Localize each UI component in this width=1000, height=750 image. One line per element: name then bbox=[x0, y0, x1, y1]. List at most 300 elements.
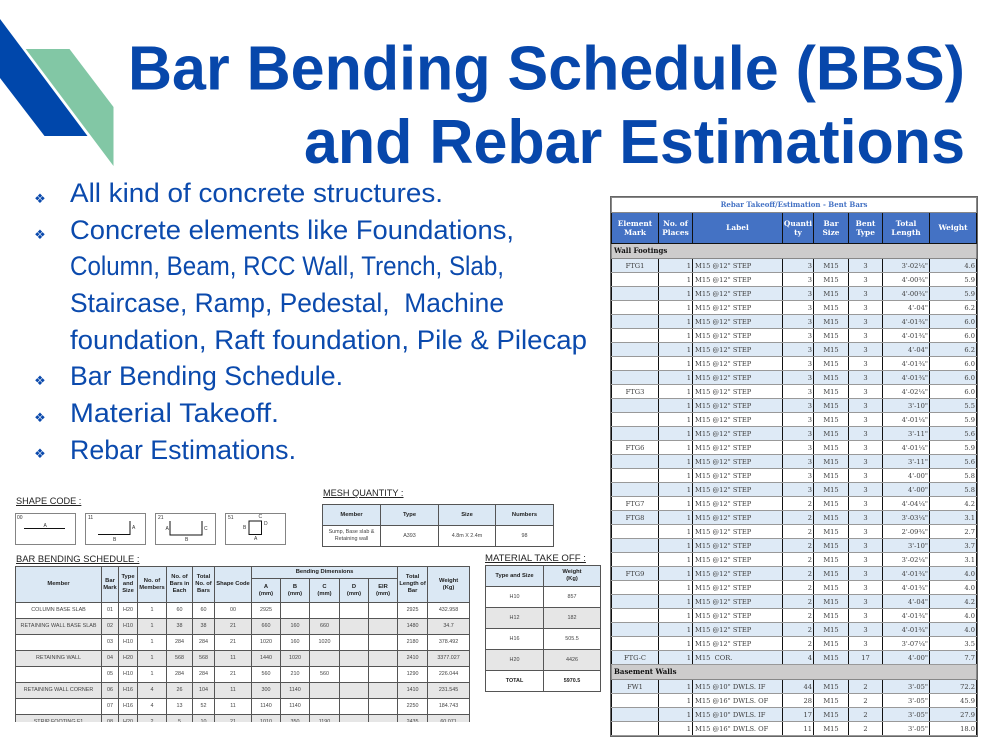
table: bar bending schedule: 38 bbox=[200, 623, 206, 629]
table: bar bending schedule: 284 bbox=[175, 671, 184, 677]
table: rebar takeoff and estimation, bent bars: 4'-01¾" bbox=[902, 318, 928, 326]
table: rebar takeoff and estimation, bent bars: M15 bbox=[823, 402, 839, 410]
table: bar bending schedule: 568 bbox=[175, 655, 184, 661]
table: rebar takeoff and estimation, bent bars: 1 bbox=[687, 304, 691, 312]
table: rebar takeoff and estimation, bent bars: M15 bbox=[823, 346, 839, 354]
table: rebar takeoff and estimation, bent bars: 45.9 bbox=[960, 696, 975, 704]
table: bar bending schedule: 38 bbox=[176, 623, 182, 629]
table: rebar takeoff and estimation, bent bars: M15 @12" STEP bbox=[695, 304, 751, 312]
table: mesh quantity: Sump, Base slab & Retaining wall bbox=[329, 529, 374, 542]
table: rebar takeoff and estimation, bent bars: M15 bbox=[823, 430, 839, 438]
table: rebar takeoff and estimation, bent bars: 3'-05" bbox=[908, 696, 928, 704]
table: bar bending schedule: 03 bbox=[107, 639, 113, 645]
table: rebar takeoff and estimation, bent bars: 1 bbox=[687, 626, 691, 634]
table: rebar takeoff and estimation, bent bars: M15 @12" STEP bbox=[695, 332, 751, 340]
table: material take off: Weight bbox=[562, 569, 582, 575]
table: rebar takeoff and estimation, bent bars: 6.0 bbox=[964, 318, 975, 326]
table: rebar takeoff and estimation, bent bars: Quanti ty bbox=[784, 218, 812, 237]
shape code diagrams bbox=[15, 513, 286, 545]
table: rebar takeoff and estimation, bent bars: 3 bbox=[863, 598, 868, 606]
table: rebar takeoff and estimation, bent bars: M15 @10" DWLS. IF bbox=[695, 682, 765, 690]
table: rebar takeoff and estimation, bent bars: M15 bbox=[823, 262, 839, 270]
table: rebar takeoff and estimation, bent bars: 11 bbox=[803, 724, 812, 732]
bullet list: scope of work: ❖ bbox=[34, 447, 46, 462]
table: rebar takeoff and estimation, bent bars: M15 @12" STEP bbox=[695, 290, 751, 298]
shape code diagrams: 11 bbox=[88, 515, 93, 521]
table: bar bending schedule: 226.044 bbox=[439, 671, 458, 677]
table: bar bending schedule: (mm) bbox=[259, 590, 273, 596]
table: bar bending schedule: Weight bbox=[439, 578, 458, 584]
table: bar bending schedule: 1140 bbox=[260, 703, 272, 709]
table: rebar takeoff and estimation, bent bars: 3.5 bbox=[964, 640, 975, 648]
table: rebar takeoff and estimation, bent bars: 3 bbox=[863, 276, 868, 284]
table: rebar takeoff and estimation, bent bars: M15 @16" DWLS. OF bbox=[695, 724, 768, 732]
table: rebar takeoff and estimation, bent bars: M15 @12" STEP bbox=[695, 556, 751, 564]
bullet list: scope of work: Column, Beam, RCC Wall, Trench, Slab, bbox=[70, 251, 504, 281]
table: bar bending schedule bbox=[15, 566, 470, 722]
table: bar bending schedule: 560 bbox=[262, 671, 270, 677]
table: rebar takeoff and estimation, bent bars: 3 bbox=[863, 542, 868, 550]
table: rebar takeoff and estimation, bent bars: 1 bbox=[687, 528, 691, 536]
table: rebar takeoff and estimation, bent bars: 4.0 bbox=[964, 570, 975, 578]
table: rebar takeoff and estimation, bent bars: 5.5 bbox=[964, 402, 975, 410]
table: bar bending schedule: 210 bbox=[290, 671, 300, 677]
table: bar bending schedule: 1 bbox=[150, 671, 154, 677]
table: rebar takeoff and estimation, bent bars: 3 bbox=[863, 556, 868, 564]
table: rebar takeoff and estimation, bent bars: 3'-10" bbox=[908, 542, 928, 550]
table: rebar takeoff and estimation, bent bars: 1 bbox=[687, 696, 691, 704]
table: rebar takeoff and estimation, bent bars: FTG3 bbox=[626, 388, 644, 396]
table: bar bending schedule: EIR bbox=[378, 584, 388, 590]
table: rebar takeoff and estimation, bent bars: 4'-02¼" bbox=[902, 388, 928, 396]
table: rebar takeoff and estimation, bent bars: 1 bbox=[687, 598, 691, 606]
table: rebar takeoff and estimation, bent bars: 3 bbox=[863, 332, 868, 340]
bullet list: scope of work: ❖ bbox=[34, 228, 46, 243]
table: rebar takeoff and estimation, bent bars: 6.2 bbox=[964, 304, 975, 312]
table: rebar takeoff and estimation, bent bars: M15 bbox=[823, 332, 839, 340]
table: rebar takeoff and estimation, bent bars: 4.0 bbox=[964, 626, 975, 634]
bullet list: scope of work: foundation, Raft foundation, Pile & Pilecap bbox=[70, 325, 587, 355]
table: rebar takeoff and estimation, bent bars: 1 bbox=[687, 458, 691, 466]
shape code diagrams: 51 bbox=[228, 515, 234, 521]
table: rebar takeoff and estimation, bent bars: M15 bbox=[823, 542, 839, 550]
table: rebar takeoff and estimation, bent bars: M15 bbox=[823, 416, 839, 424]
table: rebar takeoff and estimation, bent bars: M15 bbox=[823, 360, 839, 368]
table: bar bending schedule: Total No. of Bars bbox=[195, 574, 212, 594]
table: rebar takeoff and estimation, bent bars: 2 bbox=[808, 500, 812, 508]
table: rebar takeoff and estimation, bent bars: 3 bbox=[863, 486, 868, 494]
table: bar bending schedule: C bbox=[322, 584, 327, 590]
table: bar bending schedule: 13 bbox=[176, 703, 182, 709]
table: rebar takeoff and estimation, bent bars: 4.6 bbox=[964, 262, 975, 270]
table: rebar takeoff and estimation, bent bars: FTG-C bbox=[624, 654, 646, 662]
table: rebar takeoff and estimation, bent bars: Element Mark bbox=[618, 218, 652, 237]
table: rebar takeoff and estimation, bent bars: 3 bbox=[808, 346, 812, 354]
shape code diagrams: B bbox=[243, 525, 247, 531]
table: rebar takeoff and estimation, bent bars: M15 @12" STEP bbox=[695, 388, 751, 396]
table: bar bending schedule: RETAINING WALL bbox=[36, 655, 81, 661]
table: rebar takeoff and estimation, bent bars: 3'-10" bbox=[908, 402, 928, 410]
bullet list: scope of work: All kind of concrete structures. bbox=[70, 178, 443, 208]
table: rebar takeoff and estimation, bent bars: M15 @12" STEP bbox=[695, 584, 751, 592]
table: bar bending schedule: 284 bbox=[199, 671, 208, 677]
table: rebar takeoff and estimation, bent bars: M15 @12" STEP bbox=[695, 318, 751, 326]
table: bar bending schedule: Type and Size bbox=[121, 574, 135, 594]
table: bar bending schedule: 52 bbox=[200, 703, 206, 709]
table: rebar takeoff and estimation, bent bars: Basement Walls bbox=[614, 667, 677, 676]
table: rebar takeoff and estimation, bent bars: 2 bbox=[808, 598, 812, 606]
table: rebar takeoff and estimation, bent bars: 4'-01¾" bbox=[902, 374, 928, 382]
table: rebar takeoff and estimation, bent bars: 3 bbox=[808, 332, 812, 340]
table: rebar takeoff and estimation, bent bars: 1 bbox=[687, 416, 691, 424]
table: rebar takeoff and estimation, bent bars: 7.7 bbox=[964, 654, 975, 662]
table: rebar takeoff and estimation, bent bars: 1 bbox=[687, 388, 691, 396]
bullet list: scope of work: Concrete elements like Foundations, bbox=[70, 215, 514, 245]
table: rebar takeoff and estimation, bent bars: 17 bbox=[861, 654, 870, 662]
table: rebar takeoff and estimation, bent bars: 28 bbox=[803, 696, 812, 704]
table: bar bending schedule: 184.743 bbox=[439, 703, 458, 709]
table: bar bending schedule: No. of Bars in Each bbox=[170, 574, 189, 594]
table: rebar takeoff and estimation, bent bars: 2.7 bbox=[964, 528, 975, 536]
table: bar bending schedule: 1140 bbox=[289, 703, 301, 709]
table: rebar takeoff and estimation, bent bars: 2 bbox=[863, 696, 868, 704]
table: material take off: 857 bbox=[568, 594, 576, 600]
table: bar bending schedule: No. of Members bbox=[139, 578, 165, 590]
table: rebar takeoff and estimation, bent bars: 3 bbox=[808, 416, 812, 424]
table: rebar takeoff and estimation, bent bars: 4'-00¾" bbox=[902, 290, 928, 298]
heading: shape code: SHAPE CODE : bbox=[16, 496, 81, 506]
table: rebar takeoff and estimation, bent bars: 3 bbox=[863, 262, 868, 270]
table: rebar takeoff and estimation, bent bars: 3'-05" bbox=[908, 682, 928, 690]
table: rebar takeoff and estimation, bent bars: 1 bbox=[687, 710, 691, 718]
table: rebar takeoff and estimation, bent bars: 5.9 bbox=[964, 276, 975, 284]
table: rebar takeoff and estimation, bent bars: 1 bbox=[687, 486, 691, 494]
table: rebar takeoff and estimation, bent bars: 2 bbox=[808, 626, 812, 634]
table: rebar takeoff and estimation, bent bars: 3'-07¼" bbox=[902, 640, 928, 648]
table: material take off: H16 bbox=[510, 636, 519, 642]
table: rebar takeoff and estimation, bent bars: 3'-03¼" bbox=[902, 514, 928, 522]
table: rebar takeoff and estimation, bent bars: Wall Footings bbox=[614, 246, 667, 255]
table: rebar takeoff and estimation, bent bars: 17 bbox=[803, 710, 812, 718]
table: rebar takeoff and estimation, bent bars: M15 COR. bbox=[695, 654, 732, 662]
table: rebar takeoff and estimation, bent bars: Bar bbox=[824, 218, 838, 228]
table: rebar takeoff and estimation, bent bars: M15 @12" STEP bbox=[695, 612, 751, 620]
table: rebar takeoff and estimation, bent bars: M15 @12" STEP bbox=[695, 570, 751, 578]
shape code diagrams: A bbox=[254, 536, 258, 542]
table: rebar takeoff and estimation, bent bars: M15 bbox=[823, 486, 839, 494]
shape code diagrams: D bbox=[264, 521, 268, 527]
table: mesh quantity: Type bbox=[403, 512, 416, 518]
table: rebar takeoff and estimation, bent bars: M15 @12" STEP bbox=[695, 626, 751, 634]
heading: bar bending schedule: BAR BENDING SCHEDULE : bbox=[16, 553, 139, 564]
table: rebar takeoff and estimation, bent bars: M15 @12" STEP bbox=[695, 458, 751, 466]
table: rebar takeoff and estimation, bent bars: 3 bbox=[808, 486, 812, 494]
table: rebar takeoff and estimation, bent bars: 3 bbox=[863, 472, 868, 480]
table: rebar takeoff and estimation, bent bars: 2'-09¾" bbox=[902, 528, 928, 536]
table: bar bending schedule: 660 bbox=[320, 623, 329, 629]
table: rebar takeoff and estimation, bent bars: 2 bbox=[808, 514, 812, 522]
table: rebar takeoff and estimation, bent bars: Size bbox=[822, 228, 840, 237]
table: rebar takeoff and estimation, bent bars: 1 bbox=[687, 500, 691, 508]
table: bar bending schedule: Shape Code bbox=[216, 581, 250, 587]
table: bar bending schedule: 2250 bbox=[407, 703, 419, 709]
table: material take off: Type and Size bbox=[495, 572, 534, 578]
table: rebar takeoff and estimation, bent bars: 5.6 bbox=[964, 458, 975, 466]
table: rebar takeoff and estimation, bent bars: 1 bbox=[687, 262, 691, 270]
table: bar bending schedule: 11 bbox=[230, 703, 236, 709]
table: rebar takeoff and estimation, bent bars: 3 bbox=[863, 626, 868, 634]
table: rebar takeoff and estimation, bent bars: 1 bbox=[687, 472, 691, 480]
table: rebar takeoff and estimation, bent bars: 4'-01¾" bbox=[902, 612, 928, 620]
table: rebar takeoff and estimation, bent bars: 2 bbox=[808, 570, 812, 578]
table: rebar takeoff and estimation, bent bars: 3 bbox=[863, 458, 868, 466]
table: rebar takeoff and estimation, bent bars: 3 bbox=[863, 528, 868, 536]
table: rebar takeoff and estimation, bent bars: 5.9 bbox=[964, 444, 975, 452]
table: rebar takeoff and estimation, bent bars: 6.0 bbox=[964, 388, 975, 396]
table: bar bending schedule: H16 bbox=[123, 703, 133, 709]
table: rebar takeoff and estimation, bent bars: M15 bbox=[823, 514, 839, 522]
table: material take off: H20 bbox=[510, 656, 519, 662]
shape code diagrams: B bbox=[185, 537, 189, 543]
table: mesh quantity: A393 bbox=[403, 532, 416, 538]
table: rebar takeoff and estimation, bent bars: 4'-04" bbox=[908, 346, 928, 354]
table: rebar takeoff and estimation, bent bars: 2 bbox=[863, 682, 868, 690]
table: rebar takeoff and estimation, bent bars: 3 bbox=[863, 318, 868, 326]
table: bar bending schedule: 660 bbox=[262, 623, 270, 629]
table: rebar takeoff and estimation, bent bars: 2 bbox=[808, 542, 812, 550]
table: mesh quantity: Numbers bbox=[512, 512, 537, 518]
table: rebar takeoff and estimation, bent bars: M15 @12" STEP bbox=[695, 514, 751, 522]
table: rebar takeoff and estimation, bent bars: 1 bbox=[687, 332, 691, 340]
table: bar bending schedule: 1 bbox=[150, 623, 154, 629]
table: rebar takeoff and estimation, bent bars: 3 bbox=[863, 444, 868, 452]
table: rebar takeoff and estimation, bent bars: 4'-01¾" bbox=[902, 332, 928, 340]
table: bar bending schedule: 00 bbox=[230, 607, 236, 613]
shape code diagrams: A bbox=[44, 523, 48, 529]
table: rebar takeoff and estimation, bent bars: M15 @12" STEP bbox=[695, 276, 751, 284]
table: bar bending schedule: 01 bbox=[107, 607, 113, 613]
table: rebar takeoff and estimation, bent bars: Total Length bbox=[891, 218, 921, 237]
table: bar bending schedule: 284 bbox=[175, 639, 184, 645]
bullet list: scope of work: Staircase, Ramp, Pedestal, Machine bbox=[70, 288, 504, 318]
table: rebar takeoff and estimation, bent bars: 3'-11" bbox=[908, 430, 928, 438]
table: rebar takeoff and estimation, bent bars: 6.0 bbox=[964, 374, 975, 382]
table: rebar takeoff and estimation, bent bars: M15 @12" STEP bbox=[695, 262, 751, 270]
title bbox=[128, 34, 965, 175]
table: rebar takeoff and estimation, bent bars: M15 @12" STEP bbox=[695, 402, 751, 410]
table: rebar takeoff and estimation, bent bars: M15 bbox=[823, 570, 839, 578]
table: rebar takeoff and estimation, bent bars: 1 bbox=[687, 584, 691, 592]
table: bar bending schedule: 04 bbox=[107, 655, 113, 661]
table: rebar takeoff and estimation, bent bars: 4'-01¼" bbox=[902, 416, 928, 424]
table: rebar takeoff and estimation, bent bars: 1 bbox=[687, 514, 691, 522]
table: rebar takeoff and estimation, bent bars: 4'-00" bbox=[908, 486, 928, 494]
table: bar bending schedule: 26 bbox=[176, 687, 182, 693]
table: mesh quantity: 98 bbox=[522, 532, 528, 538]
table: rebar takeoff and estimation, bent bars: 3 bbox=[863, 514, 868, 522]
table: rebar takeoff and estimation, bent bars: 6.2 bbox=[964, 346, 975, 354]
shape code diagrams: A bbox=[166, 526, 170, 532]
table: bar bending schedule: RETAINING WALL CORNER bbox=[24, 687, 93, 693]
table: bar bending schedule: 432.958 bbox=[439, 607, 458, 613]
table: bar bending schedule: D bbox=[352, 584, 356, 590]
table: bar bending schedule: 300 bbox=[262, 687, 270, 693]
table: mesh quantity bbox=[322, 504, 554, 547]
table: rebar takeoff and estimation, bent bars: 3 bbox=[863, 612, 868, 620]
table: bar bending schedule: 60 bbox=[176, 607, 182, 613]
table: bar bending schedule: 160 bbox=[290, 623, 300, 629]
table: bar bending schedule: H10 bbox=[123, 671, 133, 677]
table: rebar takeoff and estimation, bent bars: 3 bbox=[863, 430, 868, 438]
logo: blue and green slanted shapes bbox=[0, 19, 114, 166]
shape code diagrams: 21 bbox=[158, 515, 164, 521]
table: rebar takeoff and estimation, bent bars: M15 bbox=[823, 388, 839, 396]
table: rebar takeoff and estimation, bent bars: 1 bbox=[687, 346, 691, 354]
table: rebar takeoff and estimation, bent bars: M15 @12" STEP bbox=[695, 416, 751, 424]
table: rebar takeoff and estimation, bent bars: M15 bbox=[823, 290, 839, 298]
table: bar bending schedule: B bbox=[293, 584, 297, 590]
table: rebar takeoff and estimation, bent bars: 2 bbox=[808, 584, 812, 592]
table: rebar takeoff and estimation, bent bars: 1 bbox=[687, 724, 691, 732]
table: rebar takeoff and estimation, bent bars: 1 bbox=[687, 570, 691, 578]
table: rebar takeoff and estimation, bent bars: 4.0 bbox=[964, 612, 975, 620]
table: bar bending schedule: (mm) bbox=[317, 590, 332, 596]
table: rebar takeoff and estimation, bent bars: 3 bbox=[863, 360, 868, 368]
table: rebar takeoff and estimation, bent bars: 4 bbox=[808, 654, 812, 662]
table: rebar takeoff and estimation, bent bars: 1 bbox=[687, 318, 691, 326]
shape code diagrams: B bbox=[113, 537, 117, 543]
table: bar bending schedule: 1480 bbox=[407, 623, 419, 629]
table: rebar takeoff and estimation, bent bars bbox=[610, 196, 978, 737]
table: rebar takeoff and estimation, bent bars: M15 @12" STEP bbox=[695, 528, 751, 536]
table: rebar takeoff and estimation, bent bars: M15 @12" STEP bbox=[695, 346, 751, 354]
table: bar bending schedule: Total Length of Bar bbox=[399, 574, 426, 594]
table: rebar takeoff and estimation, bent bars: 4'-00" bbox=[908, 654, 928, 662]
table: rebar takeoff and estimation, bent bars: 5.6 bbox=[964, 430, 975, 438]
table: rebar takeoff and estimation, bent bars: 3'-11" bbox=[908, 458, 928, 466]
bullet list: scope of work bbox=[34, 178, 587, 465]
table: rebar takeoff and estimation, bent bars: 1 bbox=[687, 444, 691, 452]
table: rebar takeoff and estimation, bent bars: 1 bbox=[687, 374, 691, 382]
table: bar bending schedule: 378.492 bbox=[439, 639, 458, 645]
table: rebar takeoff and estimation, bent bars: FTG7 bbox=[626, 500, 644, 508]
table: bar bending schedule: 21 bbox=[230, 639, 236, 645]
table: rebar takeoff and estimation, bent bars: 2 bbox=[808, 640, 812, 648]
table: rebar takeoff and estimation, bent bars: 3 bbox=[863, 374, 868, 382]
table: rebar takeoff and estimation, bent bars: M15 @12" STEP bbox=[695, 486, 751, 494]
table: rebar takeoff and estimation, bent bars: 4'-00" bbox=[908, 472, 928, 480]
table: rebar takeoff and estimation, bent bars: 44 bbox=[803, 682, 812, 690]
table: rebar takeoff and estimation, bent bars: 6.0 bbox=[964, 360, 975, 368]
bullet list: scope of work: ❖ bbox=[34, 374, 46, 389]
table: bar bending schedule: 160 bbox=[290, 639, 300, 645]
table: bar bending schedule: COLUMN BASE SLAB bbox=[31, 607, 86, 613]
table: rebar takeoff and estimation, bent bars: 3.1 bbox=[964, 514, 975, 522]
table: rebar takeoff and estimation, bent bars: 1 bbox=[687, 654, 691, 662]
table: rebar takeoff and estimation, bent bars: 72.2 bbox=[960, 682, 975, 690]
table: rebar takeoff and estimation, bent bars: 2 bbox=[808, 612, 812, 620]
table: rebar takeoff and estimation, bent bars: 1 bbox=[687, 556, 691, 564]
table: rebar takeoff and estimation, bent bars: M15 @10" DWLS. IF bbox=[695, 710, 765, 718]
table: rebar takeoff and estimation, bent bars: M15 bbox=[823, 654, 839, 662]
table: rebar takeoff and estimation, bent bars: M15 bbox=[823, 374, 839, 382]
table: bar bending schedule: 4 bbox=[150, 703, 154, 709]
table: bar bending schedule: 284 bbox=[199, 639, 208, 645]
table: rebar takeoff and estimation, bent bars: M15 bbox=[823, 640, 839, 648]
table: rebar takeoff and estimation, bent bars: M15 bbox=[823, 276, 839, 284]
table: rebar takeoff and estimation, bent bars: 3 bbox=[808, 458, 812, 466]
table: rebar takeoff and estimation, bent bars: 5.8 bbox=[964, 486, 975, 494]
table: bar bending schedule: 1 bbox=[150, 639, 154, 645]
table: rebar takeoff and estimation, bent bars: 2 bbox=[808, 556, 812, 564]
table: rebar takeoff and estimation, bent bars: M15 bbox=[823, 556, 839, 564]
table: bar bending schedule: (Kg) bbox=[443, 584, 454, 590]
table: material take off: H12 bbox=[510, 614, 519, 620]
bullet list: scope of work: ❖ bbox=[34, 192, 46, 207]
table: rebar takeoff and estimation, bent bars: No. of Places bbox=[662, 218, 689, 237]
table: rebar takeoff and estimation, bent bars: M15 @12" STEP bbox=[695, 640, 751, 648]
table: bar bending schedule: Bending Dimensions bbox=[296, 569, 353, 575]
table: bar bending schedule: 2925 bbox=[260, 607, 272, 613]
table: rebar takeoff and estimation, bent bars: 5.8 bbox=[964, 472, 975, 480]
table: bar bending schedule: 1020 bbox=[289, 655, 301, 661]
table: rebar takeoff and estimation, bent bars: 3 bbox=[808, 262, 812, 270]
table: rebar takeoff and estimation, bent bars: 4'-00¾" bbox=[902, 276, 928, 284]
table: rebar takeoff and estimation, bent bars: M15 bbox=[823, 584, 839, 592]
table: rebar takeoff and estimation, bent bars: 4'-04¼" bbox=[902, 500, 928, 508]
table: rebar takeoff and estimation, bent bars: Label bbox=[726, 223, 749, 232]
table: rebar takeoff and estimation, bent bars: M15 bbox=[823, 682, 839, 690]
bullet list: scope of work: Bar Bending Schedule. bbox=[70, 361, 343, 391]
title: Bar Bending Schedule (BBS) bbox=[128, 34, 965, 104]
table: rebar takeoff and estimation, bent bars: 5.9 bbox=[964, 290, 975, 298]
table: mesh quantity: 4.8m X 2.4m bbox=[452, 532, 482, 538]
table: rebar takeoff and estimation, bent bars: 18.0 bbox=[960, 724, 975, 732]
table: bar bending schedule: 2925 bbox=[407, 607, 419, 613]
table: bar bending schedule: 11 bbox=[230, 655, 236, 661]
table: rebar takeoff and estimation, bent bars: 3.1 bbox=[964, 556, 975, 564]
table: bar bending schedule: 104 bbox=[199, 687, 208, 693]
table: bar bending schedule: H20 bbox=[123, 655, 133, 661]
table: rebar takeoff and estimation, bent bars: M15 bbox=[823, 500, 839, 508]
table: bar bending schedule: 1 bbox=[150, 607, 154, 613]
table: rebar takeoff and estimation, bent bars: 3 bbox=[863, 500, 868, 508]
table: rebar takeoff and estimation, bent bars: M15 bbox=[823, 724, 839, 732]
shape code diagrams: C bbox=[258, 514, 262, 520]
table: rebar takeoff and estimation, bent bars: 3 bbox=[863, 290, 868, 298]
table: bar bending schedule: 568 bbox=[199, 655, 208, 661]
table: rebar takeoff and estimation, bent bars: 3 bbox=[808, 472, 812, 480]
table: bar bending schedule: H10 bbox=[123, 639, 133, 645]
bullet list: scope of work: Material Takeoff. bbox=[70, 398, 279, 428]
table: rebar takeoff and estimation, bent bars: 1 bbox=[687, 360, 691, 368]
table: bar bending schedule: 4 bbox=[150, 687, 154, 693]
table: rebar takeoff and estimation, bent bars: 3 bbox=[863, 388, 868, 396]
table: rebar takeoff and estimation, bent bars: M15 bbox=[823, 304, 839, 312]
table: bar bending schedule: (mm) bbox=[347, 590, 361, 596]
table: rebar takeoff and estimation, bent bars: M15 @12" STEP bbox=[695, 430, 751, 438]
table: rebar takeoff and estimation, bent bars: 4.2 bbox=[964, 500, 975, 508]
table: mesh quantity: Size bbox=[461, 512, 473, 518]
table: rebar takeoff and estimation, bent bars: 27.9 bbox=[960, 710, 975, 718]
table: rebar takeoff and estimation, bent bars: M15 bbox=[823, 710, 839, 718]
table: rebar takeoff and estimation, bent bars: 6.0 bbox=[964, 332, 975, 340]
table: rebar takeoff and estimation, bent bars: FTG6 bbox=[626, 444, 644, 452]
table: bar bending schedule: 560 bbox=[320, 671, 329, 677]
table: bar bending schedule: 1290 bbox=[407, 671, 419, 677]
table: rebar takeoff and estimation, bent bars: M15 @16" DWLS. OF bbox=[695, 696, 768, 704]
table: rebar takeoff and estimation, bent bars: 4'-01¼" bbox=[902, 444, 928, 452]
